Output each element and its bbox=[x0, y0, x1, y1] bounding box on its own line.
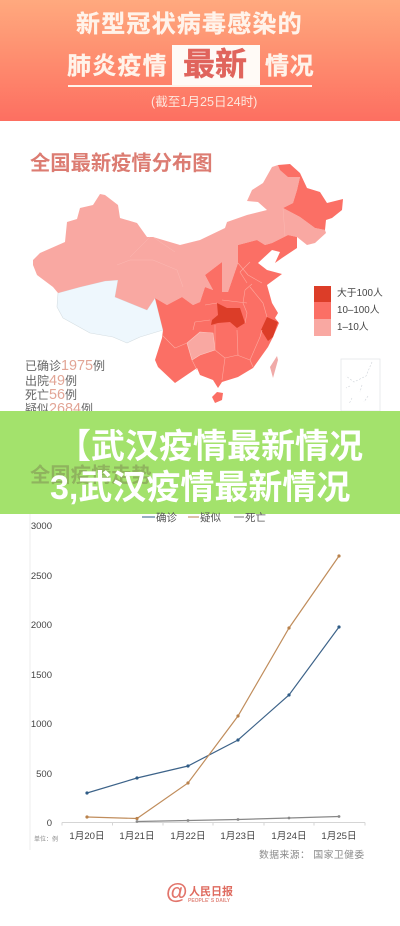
guizhou bbox=[187, 332, 215, 360]
tibet: no cases bbox=[57, 280, 163, 343]
legend swatch: 1-10 bbox=[314, 319, 331, 336]
eastern and southern provinces: 10-100 cases bbox=[155, 235, 297, 388]
chart legend: 疑似 bbox=[200, 512, 221, 524]
headline line 1: 新型冠状病毒感染的 bbox=[76, 11, 303, 38]
green overlay band bbox=[0, 411, 400, 514]
y axis labels: 1500 bbox=[31, 670, 52, 681]
chart legend bbox=[142, 511, 266, 524]
highlight box: latest bbox=[172, 45, 260, 86]
legend label: over 100: 大于100人 bbox=[337, 288, 383, 299]
headline line 2 left: 肺炎疫情 bbox=[67, 53, 168, 80]
hainan bbox=[212, 392, 223, 403]
heilongjiang bbox=[278, 164, 343, 230]
eastern province borders bbox=[162, 262, 267, 380]
logo english name: PEOPLE' S DAILY bbox=[188, 898, 230, 904]
chart legend: 死亡 bbox=[245, 511, 266, 524]
x axis labels: 1月24日 bbox=[271, 831, 307, 842]
case statistics bbox=[25, 358, 105, 417]
x axis labels: 1月20日 bbox=[69, 831, 105, 842]
y axis labels: 2500 bbox=[31, 571, 52, 582]
map legend bbox=[314, 286, 383, 336]
highlight word: 最新 bbox=[183, 46, 247, 82]
legend label: 1-10: 1–10人 bbox=[337, 322, 369, 333]
x axis bbox=[62, 822, 365, 826]
hubei: over 100 cases bbox=[211, 303, 245, 328]
chart legend: 确诊 bbox=[156, 511, 177, 524]
discharged: 出院49例 bbox=[25, 372, 77, 388]
legend swatch: 10-100 bbox=[314, 302, 331, 319]
x axis labels: 1月25日 bbox=[321, 831, 357, 842]
confirmed: 已确诊1975例 bbox=[25, 358, 105, 374]
header banner bbox=[0, 0, 400, 121]
unit label: 单位：例 bbox=[34, 835, 58, 843]
chart title showing through overlay: 全国疫情走势 bbox=[30, 465, 152, 487]
northern and western provinces: 1-10 cases bbox=[33, 165, 326, 310]
at sign: @ bbox=[166, 879, 187, 904]
series: deaths bbox=[136, 815, 340, 823]
series: confirmed bbox=[85, 625, 341, 795]
taiwan bbox=[270, 356, 278, 378]
suspected: 疑似2684例 bbox=[25, 401, 93, 417]
x axis labels: 1月23日 bbox=[220, 831, 256, 842]
zhejiang: over 100 cases bbox=[261, 317, 278, 341]
x axis labels bbox=[69, 831, 357, 842]
x axis labels: 1月22日 bbox=[170, 831, 206, 842]
legend swatch: over 100 bbox=[314, 286, 331, 302]
people's daily logo bbox=[166, 879, 233, 904]
series: suspected bbox=[85, 554, 341, 820]
x axis labels: 1月21日 bbox=[119, 831, 155, 842]
y axis labels: 3000 bbox=[31, 521, 52, 532]
chart left rule bbox=[29, 514, 31, 850]
data source: 数据来源： 国家卫健委 bbox=[259, 850, 365, 861]
y axis labels bbox=[31, 521, 52, 829]
y axis labels: 1000 bbox=[31, 719, 52, 730]
date note: (截至1月25日24时) bbox=[151, 95, 257, 109]
legend label: 10-100: 10–100人 bbox=[337, 305, 380, 316]
y axis labels: 500 bbox=[36, 769, 52, 780]
map section title: 全国最新疫情分布图 bbox=[30, 153, 213, 175]
headline line 2 right: 情况 bbox=[265, 53, 314, 80]
y axis labels: 0 bbox=[47, 818, 52, 829]
overlay title line 1: 【武汉疫情最新情况 bbox=[57, 428, 363, 466]
overlay title line 2: 3,武汉疫情最新情况 bbox=[50, 469, 350, 507]
headline underline bbox=[68, 85, 312, 87]
logo chinese name: 人民日报 bbox=[189, 886, 233, 898]
y axis labels: 2000 bbox=[31, 620, 52, 631]
deaths: 死亡56例 bbox=[25, 386, 77, 402]
western province borders bbox=[117, 208, 285, 287]
